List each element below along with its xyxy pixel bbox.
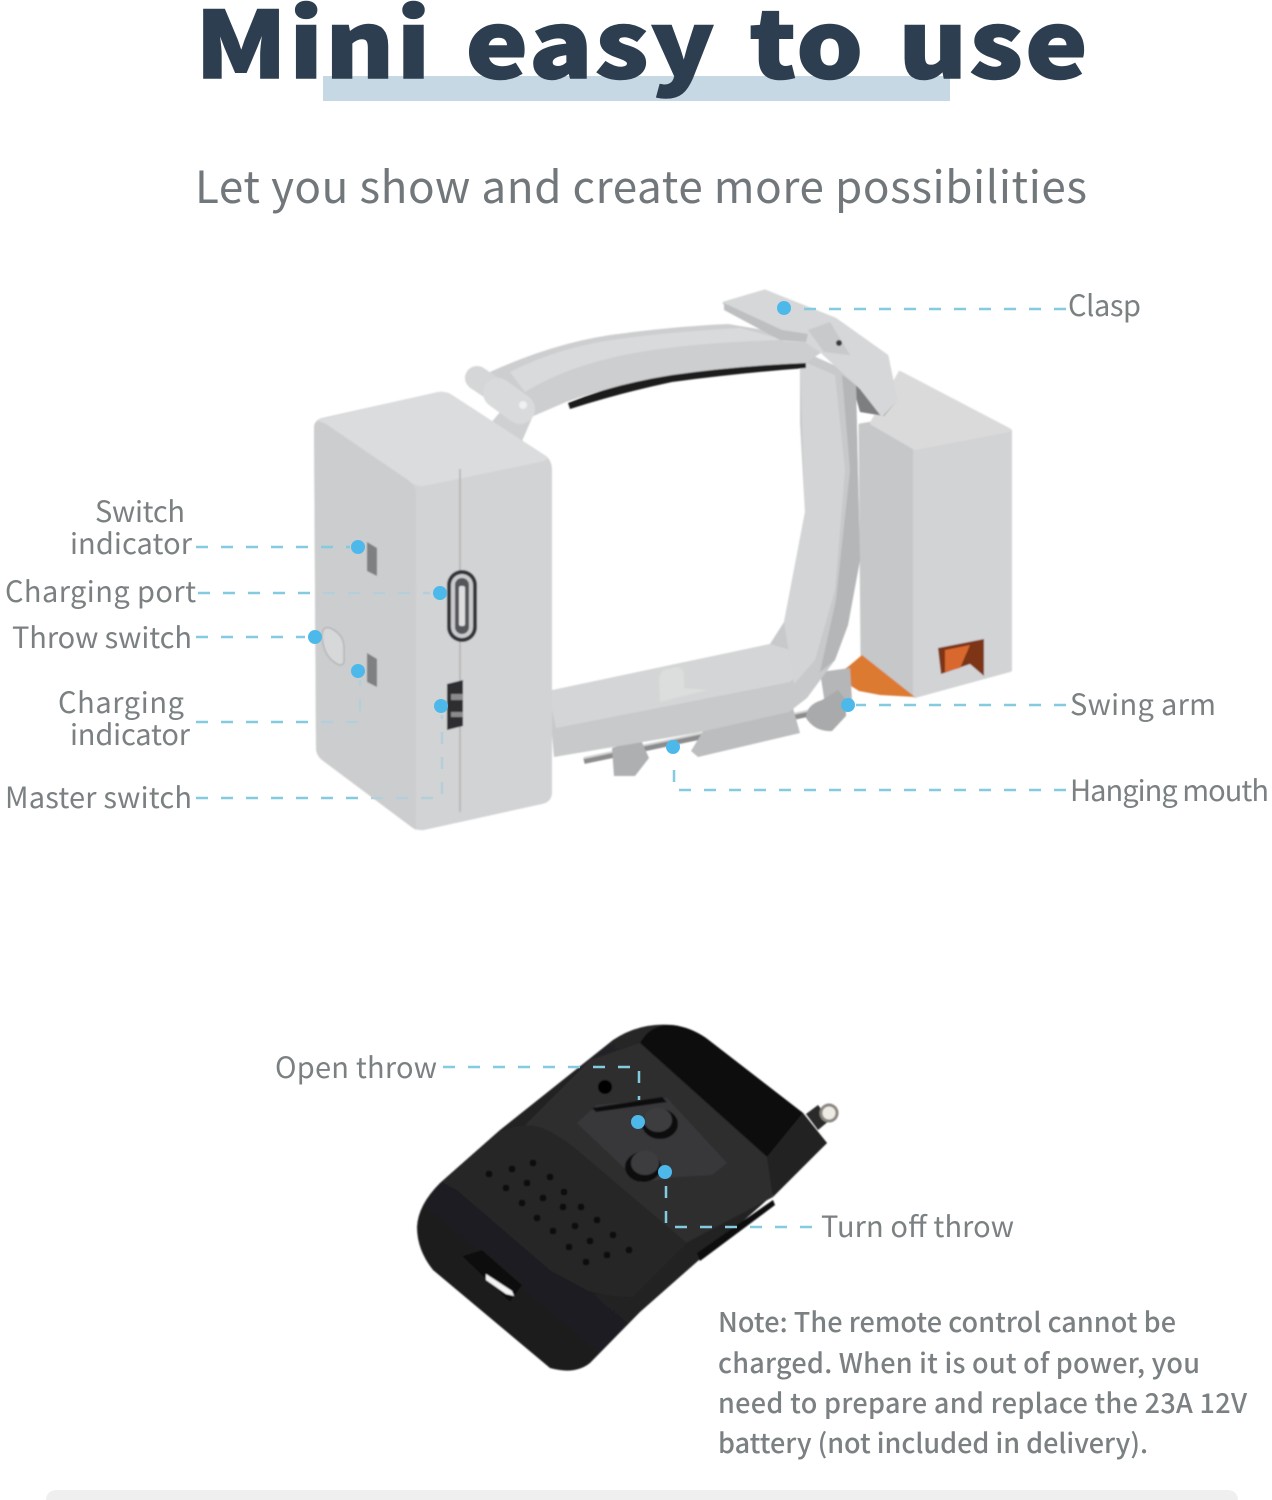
top strap: [490, 324, 822, 424]
key panel: [522, 1043, 773, 1243]
subtitle: Let you show and create more possibilities: [195, 152, 1087, 216]
grip panel with speaker holes: [442, 1125, 687, 1297]
peg: [659, 667, 708, 702]
label: clasp: Clasp: [1068, 283, 1141, 325]
right box: [835, 373, 1010, 697]
clasp: [724, 291, 896, 415]
label: charging indicator: Charging: [58, 680, 184, 722]
label: charging port: Charging port: [5, 569, 196, 611]
usb-c port: [447, 570, 477, 642]
orange servo: [938, 639, 984, 676]
keychain slot: [462, 1250, 522, 1302]
note text: need to prepare and replace the 23A 12V: [718, 1382, 1248, 1421]
leader lines for device: [196, 309, 1066, 798]
left box: [314, 392, 552, 830]
frame bracket: [548, 350, 860, 757]
label: switch indicator: indicator: [70, 521, 193, 563]
leader lines for remote: [443, 1067, 812, 1227]
indicators: [367, 542, 377, 687]
label: throw switch: Throw switch: [12, 615, 192, 657]
note text: Note: The remote control cannot be: [718, 1301, 1176, 1340]
label: charging indicator: indicator: [70, 712, 191, 754]
dark top band: [640, 1025, 803, 1157]
device: drop mechanism: [314, 291, 1010, 830]
note text: [718, 1301, 1248, 1461]
label: hanging mouth: Hanging mouth: [1070, 768, 1269, 810]
label: switch indicator: [70, 489, 193, 563]
marker dots for remote: [631, 1115, 672, 1179]
hinge: [477, 378, 532, 446]
marker dots for device: [308, 301, 855, 754]
master switch: [447, 680, 463, 730]
label: switch indicator: Switch: [95, 489, 185, 531]
remote control: [417, 1025, 837, 1371]
title highlight bar: [323, 76, 950, 101]
note text: charged. When it is out of power, you: [718, 1342, 1200, 1381]
metal latch behind clasp: [850, 376, 896, 416]
pins: [584, 668, 852, 776]
side clip: [767, 1113, 827, 1197]
remote body: [417, 1025, 827, 1371]
remote antenna: [806, 1105, 837, 1130]
throw switch button: [322, 628, 344, 665]
label: master switch: Master switch: [5, 775, 192, 817]
label: charging indicator: [58, 680, 191, 754]
note text: battery (not included in delivery).: [718, 1422, 1148, 1461]
label: open throw: Open throw: [275, 1045, 437, 1087]
label: turn off throw: Turn off throw: [821, 1204, 1014, 1246]
button panel: [577, 1080, 727, 1183]
bottom panel edge: [46, 1490, 1238, 1500]
label: swing arm: Swing arm: [1070, 682, 1216, 724]
